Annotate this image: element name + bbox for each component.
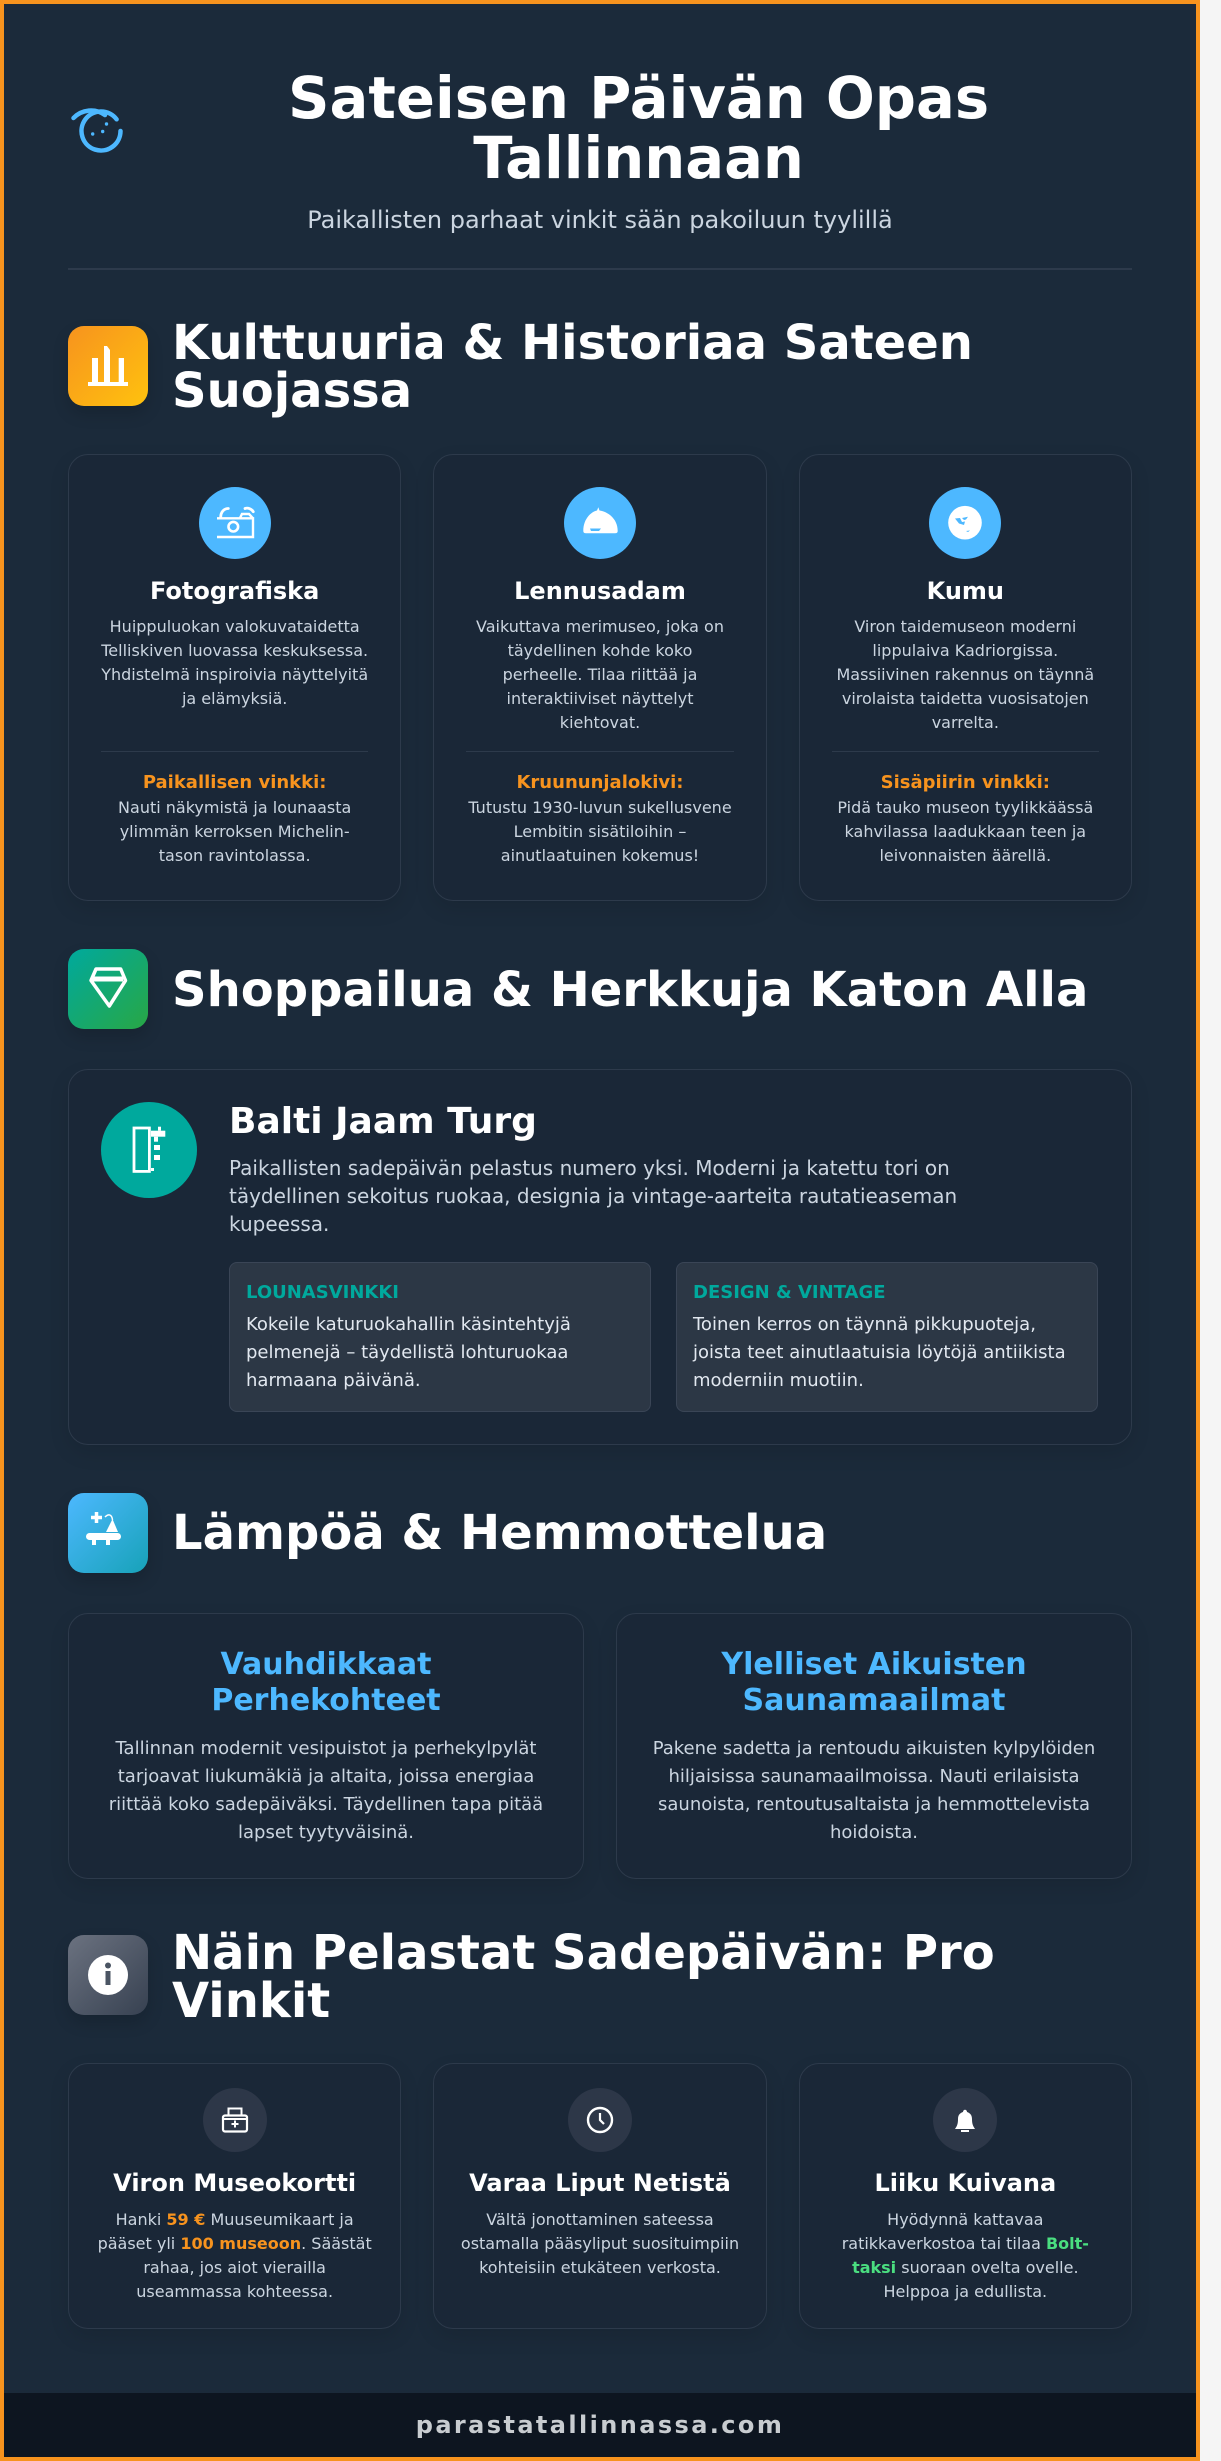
heading: culture: Suojassa	[172, 363, 412, 419]
card text: ostamalla pääsyliput suosituimpiin	[461, 2234, 739, 2253]
card text: Paikallisten sadepäivän pelastus numero yksi. Moderni ja katettu tori on	[229, 1156, 950, 1180]
card title: Kumu	[927, 577, 1004, 605]
card text: Huippuluokan valokuvataidetta	[110, 617, 360, 636]
card text: tarjoavat liukumäkiä ja altaita, joissa energiaa	[118, 1766, 534, 1787]
card text	[476, 617, 724, 732]
icon: submarine hangar dome	[564, 487, 636, 559]
heading: culture: Kulttuuria & Historiaa Sateen	[172, 315, 973, 371]
card title: Saunamaailmat	[743, 1683, 1005, 1718]
card title: Liiku Kuivana	[874, 2169, 1056, 2197]
tip text: tason ravintolassa.	[159, 846, 311, 865]
panel: museum card	[68, 2063, 401, 2329]
tip text	[118, 798, 351, 865]
title: Tallinnaan	[473, 125, 804, 192]
callout label: DESIGN & VINTAGE	[693, 1282, 886, 1303]
heading: shopping: Shoppailua & Herkkuja Katon Alla	[172, 962, 1088, 1018]
card text	[653, 1738, 1095, 1843]
footer	[4, 2393, 1196, 2457]
heading: pro tips: Näin Pelastat Sadepäivän: Pro	[172, 1924, 995, 1980]
panel: Lennusadam	[433, 454, 767, 901]
card text: varrelta.	[932, 713, 999, 732]
icon: spa section	[68, 1493, 148, 1573]
card text: taksi suoraan ovelta ovelle.	[852, 2258, 1079, 2277]
card text: Telliskiven luovassa keskuksessa.	[101, 641, 368, 660]
card text	[842, 2210, 1089, 2301]
card title: Varaa Liput Netistä	[469, 2169, 731, 2197]
card text: lapset tyytyväisinä.	[238, 1822, 414, 1843]
icon: shopping section	[68, 949, 148, 1029]
panel: Balti Jaam Turg	[68, 1069, 1132, 1445]
callout text: Toinen kerros on täynnä pikkupuoteja,	[693, 1314, 1036, 1335]
card text: Viron taidemuseon moderni	[854, 617, 1076, 636]
icon: camera	[199, 487, 271, 559]
icon: market building	[101, 1102, 197, 1198]
card text: rahaa, jos aiot vierailla	[143, 2258, 326, 2277]
card title: Fotografiska	[150, 577, 319, 605]
card text: pääset yli 100 museoon. Säästät	[98, 2234, 372, 2253]
card text	[461, 2210, 739, 2277]
card text: kupeessa.	[229, 1212, 329, 1236]
card text: kohteisiin etukäteen verkosta.	[479, 2258, 721, 2277]
callout: lunch tip	[229, 1262, 651, 1412]
subtitle: Paikallisten parhaat vinkit sään pakoiluun tyylillä	[307, 206, 893, 234]
tip text: leivonnaisten äärellä.	[879, 846, 1051, 865]
card title: Perhekohteet	[211, 1683, 441, 1718]
card text: Hanki 59 € Muuseumikaart ja	[116, 2210, 354, 2229]
card text: Vaikuttava merimuseo, joka on	[476, 617, 724, 636]
panel: stay dry	[799, 2063, 1132, 2329]
card text: kiehtovat.	[560, 713, 640, 732]
panel: Kumu	[799, 454, 1132, 901]
card text: Helppoa ja edullista.	[884, 2282, 1047, 2301]
tip text	[468, 798, 732, 865]
tip text: ainutlaatuinen kokemus!	[501, 846, 699, 865]
tip text: ylimmän kerroksen Michelin-	[120, 822, 350, 841]
callout: design and vintage	[676, 1262, 1098, 1412]
card text	[101, 617, 368, 708]
icon: culture section	[68, 326, 148, 406]
panel: adult saunas	[616, 1613, 1132, 1879]
heading: pro tips	[172, 1924, 995, 2028]
tip text: Lembitin sisätiloihin –	[514, 822, 686, 841]
card text: interaktiiviset näyttelyt	[506, 689, 693, 708]
card title	[211, 1647, 441, 1718]
footer: parastatallinnassa.com	[416, 2411, 784, 2439]
tip title: Paikallisen vinkki:	[143, 772, 326, 793]
card text: useammassa kohteessa.	[136, 2282, 333, 2301]
card title	[721, 1647, 1027, 1718]
card text: täydellinen sekoitus ruokaa, designia ja vintage-aarteita rautatieaseman	[229, 1184, 957, 1208]
card text: Yhdistelmä inspiroivia näyttelyitä	[101, 665, 368, 684]
card title: Lennusadam	[514, 577, 686, 605]
card text: täydellinen kohde koko	[508, 641, 692, 660]
card text: ratikkaverkostoa tai tilaa Bolt-	[842, 2234, 1089, 2253]
tip text: Nauti näkymistä ja lounaasta	[118, 798, 351, 817]
icon: bell	[933, 2088, 997, 2152]
card text: Tallinnan modernit vesipuistot ja perhekylpylät	[116, 1738, 536, 1759]
title	[288, 65, 989, 192]
heading: warmth: Lämpöä & Hemmottelua	[172, 1504, 827, 1560]
title: Sateisen Päivän Opas	[288, 65, 989, 132]
card text: Vältä jonottaminen sateessa	[486, 2210, 714, 2229]
card text: Massiivinen rakennus on täynnä	[836, 665, 1094, 684]
tip text: Tutustu 1930-luvun sukellusvene	[468, 798, 732, 817]
tip title: Sisäpiirin vinkki:	[881, 772, 1050, 793]
card text: saunoista, rentoutusaltaista ja hemmottelevista	[658, 1794, 1090, 1815]
callout text: moderniin muotiin.	[693, 1370, 864, 1391]
card text: ja elämyksiä.	[182, 689, 287, 708]
panel: book tickets online	[433, 2063, 767, 2329]
heading: pro tips: Vinkit	[172, 1972, 330, 2028]
card title: Balti Jaam Turg	[229, 1100, 537, 1142]
card title: Vauhdikkaat	[220, 1647, 432, 1682]
card text: lippulaiva Kadriorgissa.	[872, 641, 1058, 660]
icon: pro tips section	[68, 1935, 148, 2015]
card title: Viron Museokortti	[113, 2169, 356, 2197]
card text: Hyödynnä kattavaa	[887, 2210, 1043, 2229]
callout text: joista teet ainutlaatuisia löytöjä antiikista	[693, 1342, 1066, 1363]
callout text: pelmenejä – täydellistä lohturuokaa	[246, 1342, 568, 1363]
tip text: kahvilassa laadukkaan teen ja	[845, 822, 1086, 841]
tip text: Pidä tauko museon tyylikkäässä	[837, 798, 1093, 817]
icon: medical kit	[203, 2088, 267, 2152]
card text	[109, 1738, 543, 1843]
card text: virolaista taidetta vuosisatojen	[842, 689, 1089, 708]
icon: clock	[568, 2088, 632, 2152]
icon: palette disc	[929, 487, 1001, 559]
callout text	[246, 1314, 571, 1391]
card text: perheelle. Tilaa riittää ja	[503, 665, 697, 684]
card text: hiljaisissa saunamaailmoissa. Nauti erilaisista	[668, 1766, 1080, 1787]
card text	[229, 1156, 957, 1236]
panel: Fotografiska	[68, 454, 401, 901]
callout text: Kokeile katuruokahallin käsintehtyjä	[246, 1314, 571, 1335]
tip text	[837, 798, 1093, 865]
heading: culture	[172, 315, 973, 419]
card text	[836, 617, 1094, 732]
tip title: Kruununjalokivi:	[516, 772, 683, 793]
card text: hoidoista.	[830, 1822, 918, 1843]
callout text	[692, 1314, 1066, 1391]
callout text: harmaana päivänä.	[246, 1370, 421, 1391]
panel: family destinations	[68, 1613, 584, 1879]
card text	[98, 2210, 372, 2301]
card text: Pakene sadetta ja rentoudu aikuisten kylpylöiden	[653, 1738, 1095, 1759]
icon: rain cloud swirl	[71, 108, 123, 153]
callout label: LOUNASVINKKI	[246, 1282, 399, 1303]
card text: riittää koko sadepäiväksi. Täydellinen tapa pitää	[109, 1794, 543, 1815]
card title: Ylelliset Aikuisten	[721, 1647, 1027, 1682]
